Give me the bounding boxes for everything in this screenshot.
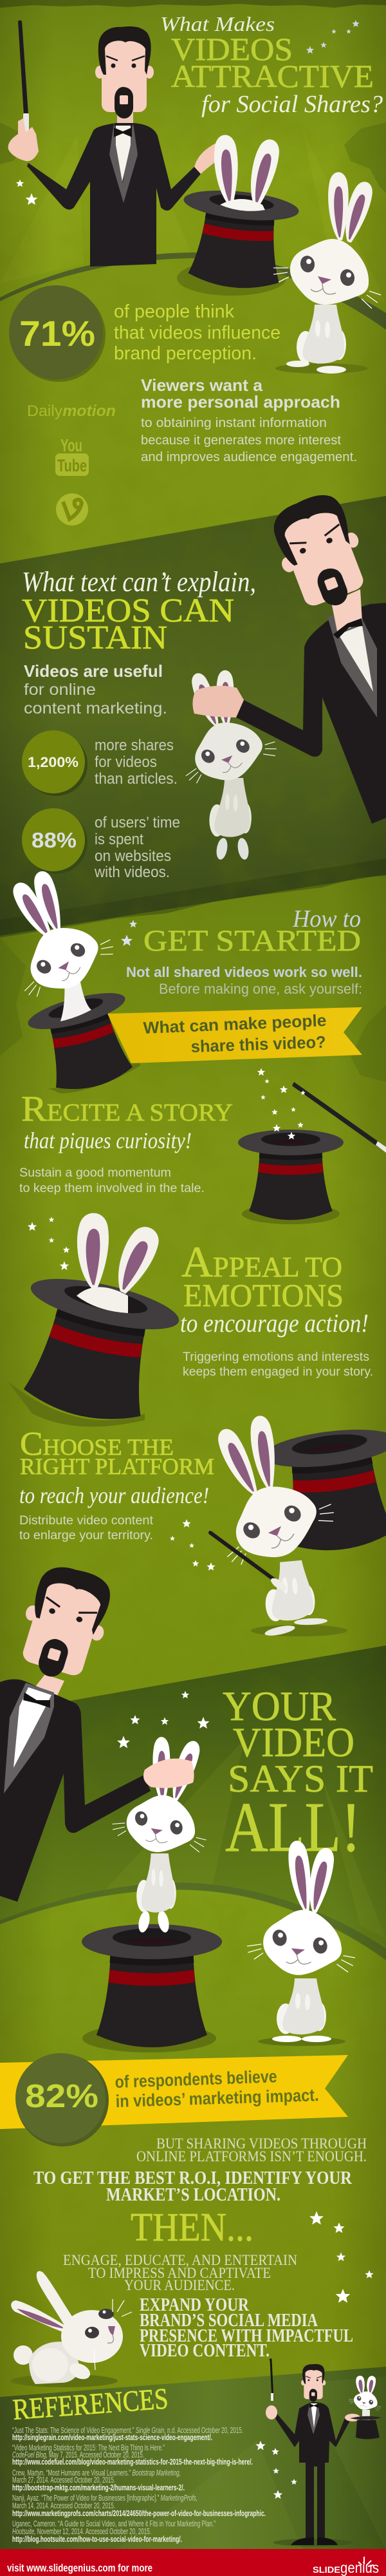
text: but sharing xyxy=(136,2136,367,2164)
reference four: March 14, 2014. Accessed October 20, 2015. xyxy=(12,2501,115,2510)
background: light top section xyxy=(0,0,386,580)
text: more shares xyxy=(95,737,178,788)
hat shadow one xyxy=(177,261,286,296)
shirt xyxy=(338,625,373,692)
reference two xyxy=(12,2443,253,2467)
background: light beams at top xyxy=(0,129,386,303)
arc: second stage edge xyxy=(0,1882,386,1960)
head xyxy=(10,1558,120,1688)
stars: wand rabbit xyxy=(170,1519,216,1571)
footer link: visit www.slidegenius.com for more xyxy=(7,2562,152,2574)
text: engage: ENGAGE, EDUCATE, AND ENTERTAIN xyxy=(63,2252,297,2268)
logo: YouTube: You xyxy=(60,435,82,455)
text: more shares: than articles. xyxy=(95,770,178,788)
background: blotches at top xyxy=(0,122,386,193)
text: of people think xyxy=(114,301,280,364)
background: dark panel section xyxy=(0,496,386,936)
heading: references: REFERENCES xyxy=(12,2382,169,2426)
heading: your video says it all xyxy=(223,1683,373,1866)
bow tie xyxy=(114,128,132,137)
text: viewers want: and improves audience engagement. xyxy=(141,450,357,464)
text: best roi xyxy=(33,2168,353,2205)
bow tie xyxy=(333,618,363,639)
hat shadow: big xyxy=(8,1381,145,1426)
title: for Social Shares? xyxy=(201,91,383,118)
reference one xyxy=(12,2426,243,2442)
reference three xyxy=(12,2468,185,2492)
jacket xyxy=(0,1680,151,1902)
logo: Vine xyxy=(56,493,88,526)
star: near your xyxy=(181,1691,189,1698)
heading: appeal to emotions xyxy=(180,1237,369,1338)
text: distribute: Distribute video content xyxy=(19,1514,154,1528)
background: first stage ground xyxy=(0,258,386,567)
reference five: http://blog.hootsuite.com/how-to-use-social-video-for-marketing/. xyxy=(12,2535,182,2544)
ribbon: question: share this video? xyxy=(190,1032,326,1056)
text: sustain: to keep them involved in the tale. xyxy=(19,1182,205,1195)
text: engage: TO IMPRESS AND CAPTIVATE xyxy=(88,2265,271,2281)
bow tie xyxy=(309,2403,318,2408)
logo: SlideGenius: SLIDE xyxy=(313,2564,340,2575)
heading: then: THEN... xyxy=(131,2206,253,2249)
reference two: “Video Marketing Statistics for 2015: The Next Big Thing Is Here.” xyxy=(12,2443,165,2452)
heading: recite a story: RECITE A STORY xyxy=(21,1089,233,1129)
text: viewers want: Viewers want a xyxy=(141,375,263,395)
hat shadow: upright xyxy=(242,1204,340,1224)
text: viewers want: because it generates more interest xyxy=(141,433,341,448)
text: of people think: of people think xyxy=(114,301,234,322)
title: ATTRACTIVE xyxy=(171,58,374,94)
hands xyxy=(266,2405,277,2420)
jacket xyxy=(272,2402,351,2463)
heading: videos can sustain: VIDEOS CAN xyxy=(22,592,234,629)
text: of people think: brand perception. xyxy=(114,343,257,364)
shoes xyxy=(291,2537,338,2545)
big hat with ears xyxy=(5,1213,183,1433)
reference two: http://www.codefuel.com/blog/video-marketing-statistics-for-2015-the-next-big-thing-is-here/. xyxy=(12,2458,253,2467)
head xyxy=(95,26,154,118)
text: triggering: Triggering emotions and interests xyxy=(183,1350,369,1364)
text: videos are useful xyxy=(24,661,167,717)
title: VIDEOS xyxy=(171,31,293,67)
text: sustain: Sustain a good momentum xyxy=(19,1166,171,1180)
heading: recite a story: that piques curiosity! xyxy=(24,1128,192,1153)
lapels xyxy=(308,2403,320,2434)
legs xyxy=(306,2460,325,2541)
heading: videos can sustain: SUSTAIN xyxy=(23,620,167,656)
lapels xyxy=(109,124,138,203)
shirt xyxy=(116,126,131,182)
reference four: http://www.marketingprofs.com/charts/2014/24650/the-power-of-video-for-businesses-infographic. xyxy=(12,2509,266,2518)
text: users time: on websites xyxy=(95,848,171,865)
hat shadow: bottom xyxy=(82,2024,216,2052)
text: not all shared videos: Before making one, ask yourself: xyxy=(159,981,362,997)
background: references beams xyxy=(116,2376,386,2550)
heading: get started xyxy=(143,905,361,958)
heading: your video says it all: ALL! xyxy=(225,1788,361,1866)
reference four: Nanji, Ayaz. “The Power of Video for Businesses [Infographic].” MarketingProfs, xyxy=(12,2494,198,2503)
lapels xyxy=(4,1683,54,1794)
reference three: Crew, Martyn. “Most Humans are Visual Learners.” Bootstrap Marketing, xyxy=(12,2468,181,2477)
rabbit: side view xyxy=(11,2271,132,2387)
reference five: Uganec, Cameron. “A Guide to Social Video, and Where it Fits in Your Marketing Plan.” xyxy=(12,2519,216,2528)
text: users time: of users’ time xyxy=(95,814,180,831)
reference one: “Just The Stats: The Science of Video Engagement.” Single Grain, n.d. Accessed October 20, 2015. xyxy=(12,2426,243,2435)
background: dark torn band along panel bottom xyxy=(0,858,386,938)
ribbon: 82 percent: of respondents believe xyxy=(115,2067,277,2092)
text: best roi: MARKET’S LOCATION. xyxy=(106,2184,280,2205)
ribbon: 82 percent: in videos’ marketing impact. xyxy=(115,2085,319,2111)
jacket xyxy=(27,123,201,267)
heading: appeal to emotions: APPEAL TO xyxy=(181,1237,342,1286)
rabbit one xyxy=(273,172,381,374)
magician one xyxy=(8,21,219,267)
reference five: Hootsuite, November 12, 2014. Accessed October 20, 2015. xyxy=(12,2527,151,2536)
stars: get started xyxy=(121,920,137,946)
background: light middle section xyxy=(0,869,386,1719)
hat shadow: get started xyxy=(48,1056,140,1094)
wand: recite a story xyxy=(292,1082,386,1153)
text: users time: is spent xyxy=(95,831,143,848)
footer bar xyxy=(0,2549,386,2576)
background: beams on stage two xyxy=(90,1739,386,1938)
reference one: http://singlegrain.com/video-marketing/just-stats-science-video-engagement/. xyxy=(12,2433,212,2442)
text: videos are useful: Videos are useful xyxy=(24,661,163,681)
hat: tilted right xyxy=(261,1423,386,1558)
background: lower section xyxy=(0,2125,386,2402)
text: distribute: to enlarge your territory. xyxy=(19,1529,153,1542)
left hand xyxy=(8,118,39,161)
heading: choose the right platform: to reach your audience! xyxy=(19,1482,209,1508)
reference three: http://bootstrap-mktg.com/marketing-2/humans-visual-learners-2/. xyxy=(12,2483,185,2492)
stars: left of magician xyxy=(16,179,38,205)
text: but sharing: BUT SHARING VIDEOS THROUGH xyxy=(156,2136,367,2152)
ribbon: 82 percent xyxy=(0,2055,348,2129)
text: viewers want xyxy=(141,375,357,464)
stars: recite a story xyxy=(257,1068,306,1139)
right hand xyxy=(194,143,219,174)
lapels xyxy=(327,609,377,717)
stars: title xyxy=(306,20,360,53)
text: videos are useful: content marketing. xyxy=(24,699,167,717)
heading: recite a story xyxy=(21,1089,233,1153)
magician two xyxy=(236,487,386,824)
text: distribute xyxy=(19,1514,154,1542)
shirt xyxy=(311,2403,317,2428)
text: viewers want: more personal approach xyxy=(141,392,340,412)
heading: your video says it all: VIDEO xyxy=(233,1719,354,1766)
stat: 82% xyxy=(15,2053,109,2146)
stars: big hat xyxy=(28,1217,69,1270)
rabbit: jumping from hat xyxy=(110,1737,207,1933)
stat: 88% xyxy=(22,808,87,874)
reference five xyxy=(12,2519,216,2544)
hat: recite a story xyxy=(238,1130,344,1220)
text: engage: YOUR AUDIENCE. xyxy=(124,2277,235,2293)
hat with ears one xyxy=(175,135,300,294)
logo: SlideGenius: genius xyxy=(340,2559,379,2576)
stat: 88%: 88% xyxy=(32,828,77,852)
small hat with rabbit xyxy=(349,2375,381,2439)
stat: 71% xyxy=(9,285,106,382)
title: What Makes xyxy=(160,12,275,35)
shirt xyxy=(14,1687,51,1768)
hung rabbit xyxy=(172,670,282,860)
text: but sharing: ONLINE PLATFORMS ISN’T ENOUGH. xyxy=(136,2148,367,2164)
hat: bottom centre xyxy=(82,1924,222,2047)
text: expand your brand xyxy=(140,2295,353,2361)
head xyxy=(301,2364,326,2402)
heading: choose the right platform: CHOOSE THE xyxy=(20,1426,174,1463)
magician hand: holding rabbit bottom xyxy=(143,1759,194,1788)
small magician xyxy=(266,2360,360,2546)
bow tie xyxy=(23,1692,50,1708)
title xyxy=(160,12,383,118)
text: viewers want: to obtaining instant information xyxy=(141,416,327,430)
text: expand your brand: BRAND’S SOCIAL MEDIA xyxy=(140,2310,318,2331)
hat with rabbit: get started xyxy=(6,869,145,1099)
arc: first stage edge xyxy=(0,252,386,330)
heading: your video says it all: SAYS IT xyxy=(228,1757,373,1800)
background: dark stage section xyxy=(0,1645,386,1971)
logo: YouTube: Tube xyxy=(57,456,87,475)
neck xyxy=(32,1674,64,1697)
ribbon: question xyxy=(107,1007,362,1063)
neck xyxy=(117,111,133,129)
text: videos are useful: for online xyxy=(24,681,96,699)
wand xyxy=(270,2360,273,2400)
background: torn dark top edge xyxy=(0,0,386,8)
text: triggering xyxy=(183,1350,373,1379)
stars: right xyxy=(309,2211,374,2303)
magician hand: holding rabbit xyxy=(192,686,244,717)
head xyxy=(262,487,378,619)
neck xyxy=(331,589,362,634)
text: of people think: that videos influence xyxy=(114,323,280,343)
heading: choose the right platform: RIGHT PLATFORM xyxy=(20,1454,214,1479)
stat: 71%: 71% xyxy=(19,313,95,354)
heading: videos can sustain: What text can’t explain, xyxy=(22,566,256,598)
background: dark blotches below panel xyxy=(0,938,386,1082)
heading: choose the right platform xyxy=(19,1426,214,1508)
logo: SlideGenius xyxy=(313,2557,379,2576)
heading: videos can sustain xyxy=(22,566,256,656)
text: not all shared videos xyxy=(126,964,362,997)
stat: 1,200% xyxy=(22,730,87,796)
stat: 1,200%: 1,200% xyxy=(28,754,78,770)
text: more shares: more shares xyxy=(95,737,174,754)
text: more shares: for videos xyxy=(95,753,157,771)
reference three: March 27, 2014. Accessed October 20, 2015. xyxy=(12,2476,115,2485)
rabbit: right standing xyxy=(243,1839,357,2046)
heading: appeal to emotions: EMOTIONS xyxy=(183,1277,344,1313)
text: not all shared videos: Not all shared videos work so well. xyxy=(126,964,362,980)
text: expand your brand: EXPAND YOUR xyxy=(140,2295,250,2315)
text: users time xyxy=(94,814,180,881)
text: expand your brand: VIDEO CONTENT. xyxy=(140,2340,270,2361)
logo: YouTube xyxy=(55,435,89,476)
heading: get started: GET STARTED xyxy=(143,924,361,958)
references list xyxy=(12,2426,266,2544)
text: users time: with videos. xyxy=(94,864,170,881)
ribbon: question: What can make people xyxy=(143,1010,327,1037)
background: second stage ground xyxy=(0,1889,386,2132)
text: sustain xyxy=(19,1166,205,1195)
stat: 82%: 82% xyxy=(25,2078,98,2114)
wand xyxy=(18,21,29,136)
reference four xyxy=(12,2494,266,2518)
magician three xyxy=(0,1558,151,1902)
stars: references xyxy=(255,2441,297,2499)
reference two: CodeFuel Blog, May 7, 2015. Accessed October 20, 2015. xyxy=(12,2450,144,2459)
text: engage xyxy=(63,2252,297,2293)
jacket xyxy=(236,603,386,824)
background: references section xyxy=(0,2367,386,2550)
stars: above rabbit xyxy=(117,1715,210,1748)
heading: get started: How to xyxy=(292,905,361,933)
text: triggering: keeps them engaged in your story. xyxy=(183,1365,373,1379)
logo: Dailymotion: Dailymotion xyxy=(27,402,116,420)
heading: your video says it all: YOUR xyxy=(223,1683,336,1730)
rabbit with wand xyxy=(207,1414,347,1638)
